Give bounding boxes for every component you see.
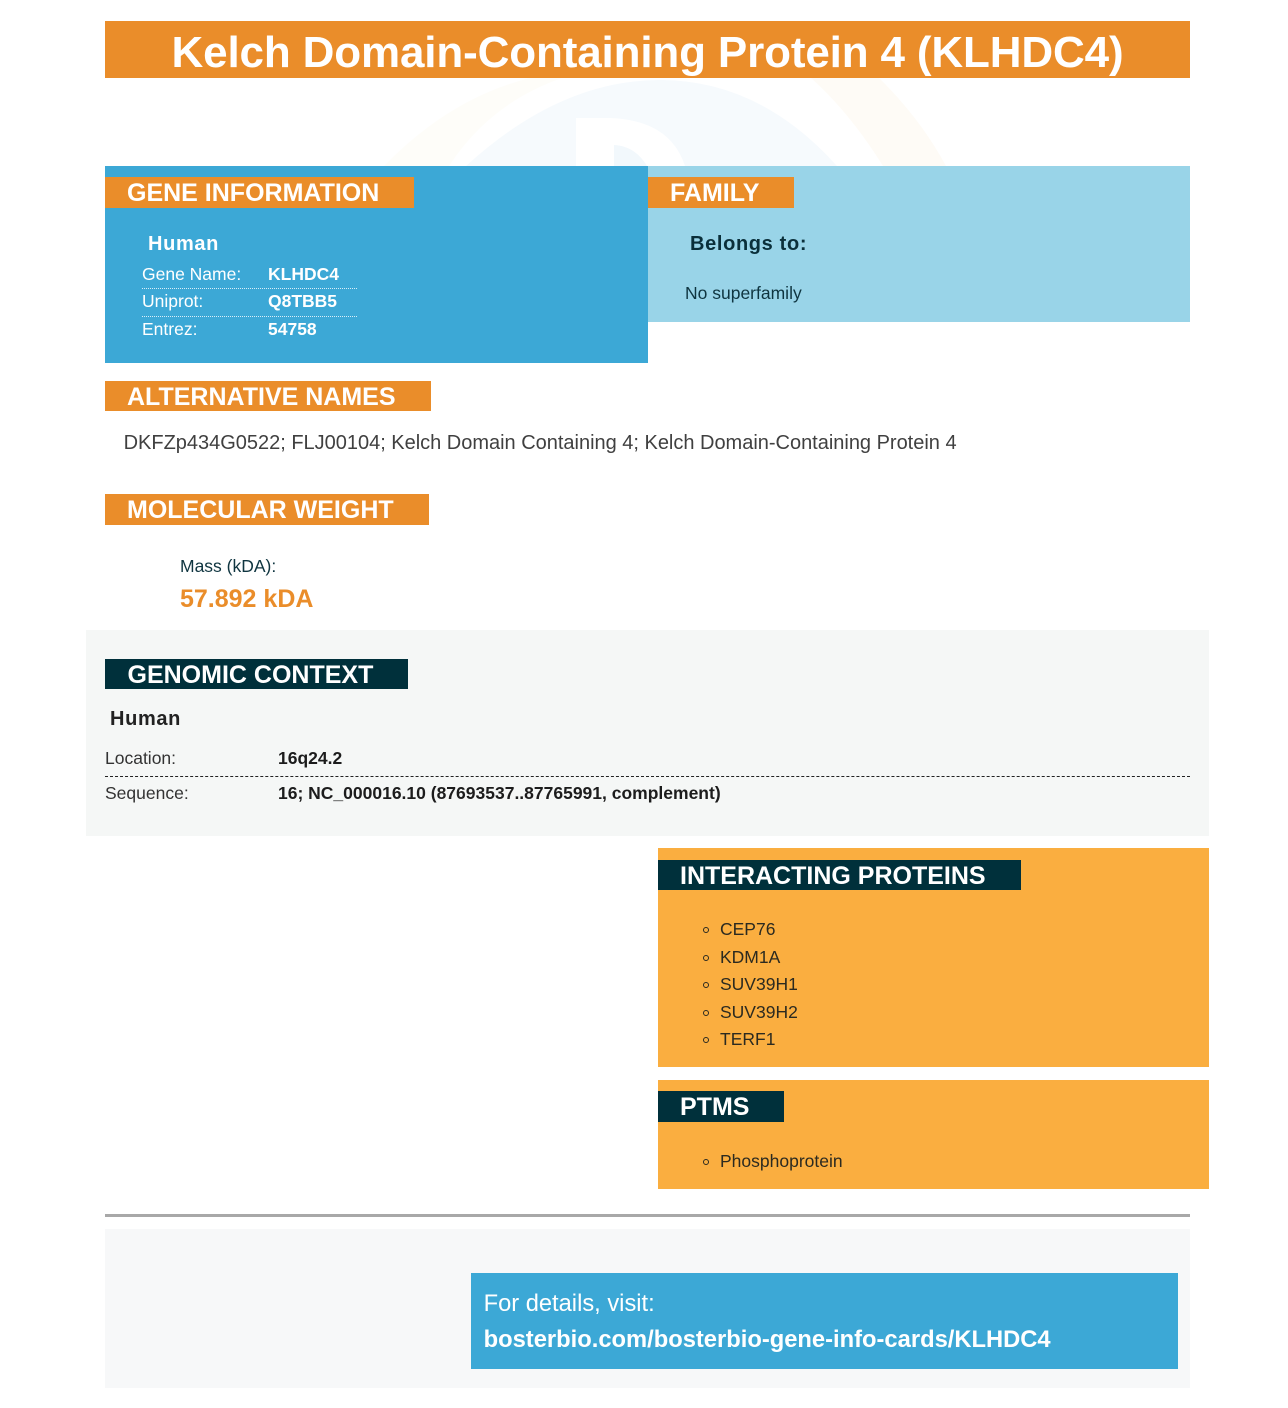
panel: genomic context: 16; NC_000016.10 (87693537..87765991, complement) — [278, 783, 721, 803]
mass label: Mass (kDA): — [180, 556, 276, 576]
heading: ptms — [658, 1091, 784, 1122]
heading: interacting proteins: INTERACTING PROTEINS — [680, 862, 986, 890]
watermark logo — [466, 78, 946, 166]
uniprot row — [142, 289, 357, 317]
heading: family: FAMILY — [670, 179, 759, 207]
panel: gene information — [105, 166, 648, 363]
location row: 16q24.2 — [278, 748, 342, 768]
footer divider — [105, 1214, 1190, 1217]
gene name row: KLHDC4 — [268, 264, 339, 284]
callout: details link — [471, 1273, 1178, 1369]
sequence row — [105, 783, 721, 803]
heading: genomic context: GENOMIC CONTEXT — [128, 661, 373, 689]
heading: molecular weight: MOLECULAR WEIGHT — [127, 496, 394, 524]
title banner: Kelch Domain-Containing Protein 4 (KLHDC4) — [172, 28, 1123, 77]
entrez row — [142, 319, 317, 339]
location row — [105, 746, 1190, 777]
gene name row: Gene Name: — [142, 264, 241, 284]
location row: Location: — [105, 748, 176, 768]
panel: ptms — [658, 1080, 1209, 1189]
callout url: bosterbio.com/bosterbio-gene-info-cards/KLHDC4 — [484, 1327, 1051, 1353]
panel: interacting proteins — [658, 848, 1209, 1067]
entrez row: 54758 — [268, 319, 317, 339]
uniprot row: Q8TBB5 — [268, 291, 337, 311]
footer panel — [105, 1229, 1190, 1388]
species label: Human — [110, 708, 181, 730]
belongs to label: Belongs to: — [690, 233, 807, 255]
panel: genomic context — [86, 630, 1209, 836]
callout label: For details, visit: — [484, 1291, 655, 1317]
protein list: KDM1A — [720, 947, 780, 967]
sequence row: Sequence: — [105, 783, 189, 803]
heading: family — [648, 177, 794, 208]
heading: gene information: GENE INFORMATION — [127, 179, 379, 207]
protein list: CEP76 — [720, 919, 775, 939]
panel: family — [648, 166, 1190, 322]
protein list: SUV39H2 — [720, 1002, 798, 1022]
protein list: SUV39H1 — [720, 974, 798, 994]
heading: alternative names: ALTERNATIVE NAMES — [127, 383, 396, 411]
protein list: TERF1 — [720, 1029, 775, 1049]
heading: ptms: PTMS — [680, 1093, 749, 1121]
ptm list: Phosphoprotein — [720, 1151, 843, 1171]
protein list — [703, 919, 798, 1049]
uniprot row: Uniprot: — [142, 291, 203, 311]
superfamily text: No superfamily — [685, 283, 802, 303]
species label: Human — [148, 233, 219, 255]
gene name row — [142, 262, 357, 289]
entrez row: Entrez: — [142, 319, 197, 339]
mass value: 57.892 kDA — [180, 585, 313, 613]
alternative names text: DKFZp434G0522; FLJ00104; Kelch Domain Containing 4; Kelch Domain-Containing Protein 4 — [124, 432, 957, 454]
